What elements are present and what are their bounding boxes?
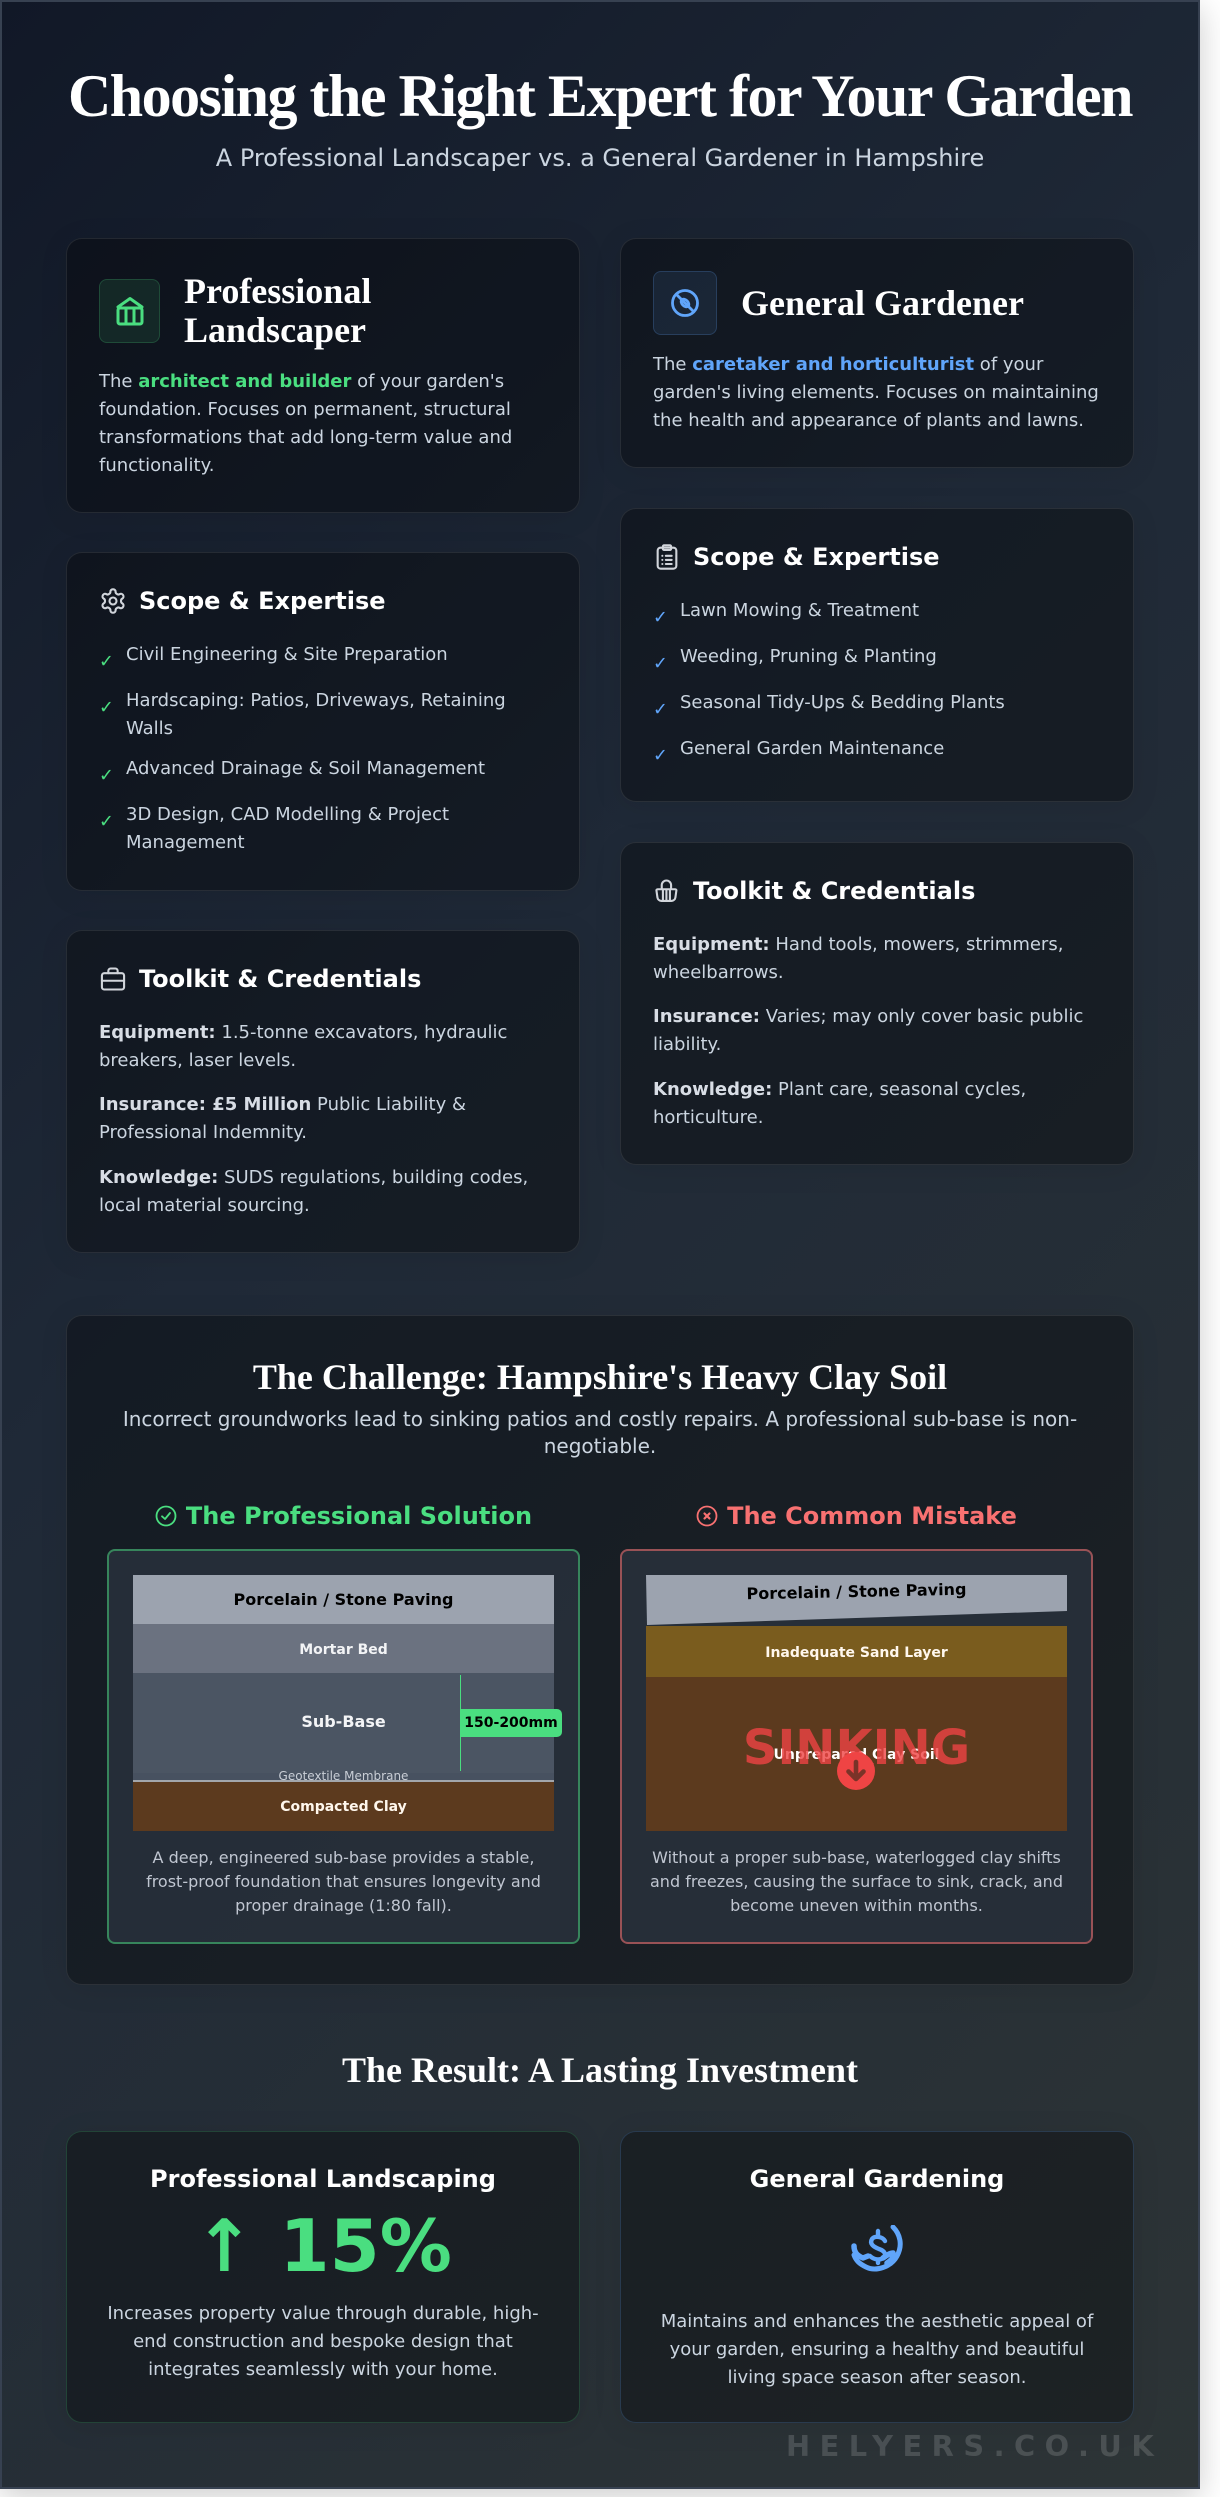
checklist: gardener scope: General Garden Maintenance bbox=[680, 738, 944, 759]
checklist: landscaper scope: ✓ bbox=[99, 766, 114, 786]
label: sinking: SINKING bbox=[743, 1720, 970, 1776]
text: landscaper credentials: Insurance: £5 Million Public Liability & Professional Indemnity. bbox=[99, 1094, 466, 1143]
panel: general gardener intro bbox=[620, 238, 1134, 468]
panel: gardener toolkit and credentials bbox=[620, 842, 1134, 1165]
text: gardening result: Maintains and enhances the aesthetic appeal of your garden, ensuring a healthy and beautiful living space season after season. bbox=[661, 2311, 1093, 2388]
text: challenge intro: Incorrect groundworks lead to sinking patios and costly repairs. A professional sub-base is non-negotiable. bbox=[123, 1406, 1077, 1458]
heading: professional landscaper: Professional Landscaper bbox=[184, 271, 371, 350]
checklist: gardener scope: Lawn Mowing & Treatment bbox=[680, 600, 919, 621]
icon: landscaper house bbox=[99, 279, 160, 343]
panel: challenge section bbox=[66, 1315, 1134, 1985]
caption: common mistake: Without a proper sub-base, waterlogged clay shifts and freezes, causing the surface to sink, crack, and become uneven within months. bbox=[650, 1848, 1063, 1915]
panel: landscaper scope and expertise bbox=[66, 552, 580, 891]
layer: membrane line bbox=[133, 1780, 554, 1782]
layer: geotextile membrane bbox=[133, 1773, 554, 1780]
heading: toolkit and credentials: Toolkit & Credentials bbox=[139, 965, 421, 993]
checklist: landscaper scope: ✓ bbox=[99, 652, 114, 672]
checklist: gardener scope bbox=[653, 600, 1005, 766]
cross-section: correct layers bbox=[133, 1575, 562, 1831]
layer: mortar bed: Mortar Bed bbox=[299, 1642, 388, 1658]
heading: professional landscaping: Professional Landscaping bbox=[150, 2165, 496, 2193]
layer: sub-base: Sub-Base bbox=[301, 1712, 386, 1731]
checklist: landscaper scope: ✓ bbox=[99, 812, 114, 832]
layer: inadequate sand bbox=[646, 1626, 1067, 1677]
checklist: landscaper scope: 3D Design, CAD Modelling & Project Management bbox=[126, 804, 449, 853]
text: landscaping result: Increases property value through durable, high-end construction and bespoke design that integrates seamlessly with your home. bbox=[107, 2303, 539, 2380]
watermark: HELYERS.CO.UK bbox=[786, 2429, 1163, 2463]
layer: mortar bed bbox=[133, 1624, 554, 1673]
panel: gardener scope and expertise bbox=[620, 508, 1134, 802]
label: tilted paving: Porcelain / Stone Paving bbox=[746, 1580, 967, 1603]
layer: compacted clay bbox=[133, 1782, 554, 1831]
heading: toolkit and credentials: Toolkit & Credentials bbox=[693, 877, 975, 905]
checklist: gardener scope: ✓ bbox=[653, 700, 668, 720]
stat: 15 percent value increase: ↑ 15% bbox=[194, 2204, 452, 2288]
checklist: landscaper scope bbox=[99, 644, 506, 853]
text: gardener credentials: Knowledge: Plant care, seasonal cycles, horticulture. bbox=[653, 1079, 1026, 1128]
layer: compacted clay: Compacted Clay bbox=[280, 1799, 407, 1815]
checklist: landscaper scope: Advanced Drainage & Soil Management bbox=[126, 758, 485, 779]
text: landscaper credentials bbox=[99, 1022, 528, 1216]
checklist: gardener scope: Weeding, Pruning & Planting bbox=[680, 646, 937, 667]
icon: down arrow badge bbox=[837, 1752, 875, 1790]
layer: paving bbox=[133, 1575, 554, 1624]
panel: common mistake diagram bbox=[620, 1549, 1093, 1944]
description: gardener: The caretaker and horticulturist of your garden's living elements. Focuses on maintaining the health and appearance of plants and lawns. bbox=[653, 354, 1099, 431]
subtitle: A Professional Landscaper vs. a General Gardener in Hampshire bbox=[216, 144, 984, 172]
caption: professional solution: A deep, engineered sub-base provides a stable, frost-proof foundation that ensures longevity and proper drainage (1:80 fall). bbox=[146, 1848, 541, 1915]
heading: scope and expertise: Scope & Expertise bbox=[139, 587, 386, 615]
checklist: landscaper scope: Civil Engineering & Site Preparation bbox=[126, 644, 448, 665]
heading: the challenge: The Challenge: Hampshire's Heavy Clay Soil bbox=[253, 1357, 947, 1397]
dimension label bbox=[460, 1709, 562, 1737]
heading: the result: The Result: A Lasting Investment bbox=[342, 2050, 858, 2090]
description: landscaper: The architect and builder of your garden's foundation. Focuses on permanent, structural transformations that add long-term value and functionality. bbox=[99, 371, 512, 476]
layer: sub-base bbox=[133, 1673, 554, 1773]
checklist: landscaper scope: Hardscaping: Patios, Driveways, Retaining Walls bbox=[126, 690, 506, 739]
heading: the common mistake: The Common Mistake bbox=[727, 1502, 1017, 1530]
text: landscaper credentials: Equipment: 1.5-tonne excavators, hydraulic breakers, laser levels. bbox=[99, 1022, 507, 1071]
text: gardener credentials: Equipment: Hand tools, mowers, strimmers, wheelbarrows. bbox=[653, 934, 1063, 983]
icon: cycling dollar bbox=[851, 2225, 903, 2272]
panel: professional landscaper intro bbox=[66, 238, 580, 513]
layer: sinking paving shape bbox=[646, 1575, 1067, 1625]
heading: general gardener: General Gardener bbox=[741, 283, 1024, 323]
checklist: gardener scope: Seasonal Tidy-Ups & Bedding Plants bbox=[680, 692, 1005, 713]
panel: professional solution diagram bbox=[107, 1549, 580, 1944]
checklist: gardener scope: ✓ bbox=[653, 654, 668, 674]
title: Choosing the Right Expert for Your Garden bbox=[68, 63, 1132, 129]
panel: general gardening result bbox=[620, 2131, 1134, 2423]
dimension line bbox=[460, 1675, 461, 1771]
layer: paving: Porcelain / Stone Paving bbox=[234, 1590, 453, 1609]
layer: unprepared clay: Unprepared Clay Soil bbox=[774, 1747, 939, 1763]
heading: the professional solution: The Professional Solution bbox=[186, 1502, 532, 1530]
heading: general gardening: General Gardening bbox=[750, 2165, 1004, 2193]
text: gardener credentials bbox=[653, 934, 1083, 1128]
layer: geotextile membrane: Geotextile Membrane bbox=[279, 1769, 408, 1783]
checklist: landscaper scope: ✓ bbox=[99, 698, 114, 718]
layer: inadequate sand: Inadequate Sand Layer bbox=[765, 1645, 948, 1661]
heading: scope and expertise: Scope & Expertise bbox=[693, 543, 940, 571]
text: gardener credentials: Insurance: Varies; may only cover basic public liability. bbox=[653, 1006, 1083, 1055]
checklist: gardener scope: ✓ bbox=[653, 608, 668, 628]
text: landscaper credentials: Knowledge: SUDS regulations, building codes, local material sourcing. bbox=[99, 1167, 528, 1216]
layer: unprepared clay bbox=[646, 1677, 1067, 1831]
cross-section: failed layers bbox=[646, 1575, 1067, 1831]
panel: landscaper toolkit and credentials bbox=[66, 930, 580, 1253]
icon: gardener compass bbox=[653, 271, 717, 335]
checklist: gardener scope: ✓ bbox=[653, 746, 668, 766]
panel: professional landscaping result bbox=[66, 2131, 580, 2423]
dimension label: 150-200mm bbox=[464, 1715, 558, 1731]
